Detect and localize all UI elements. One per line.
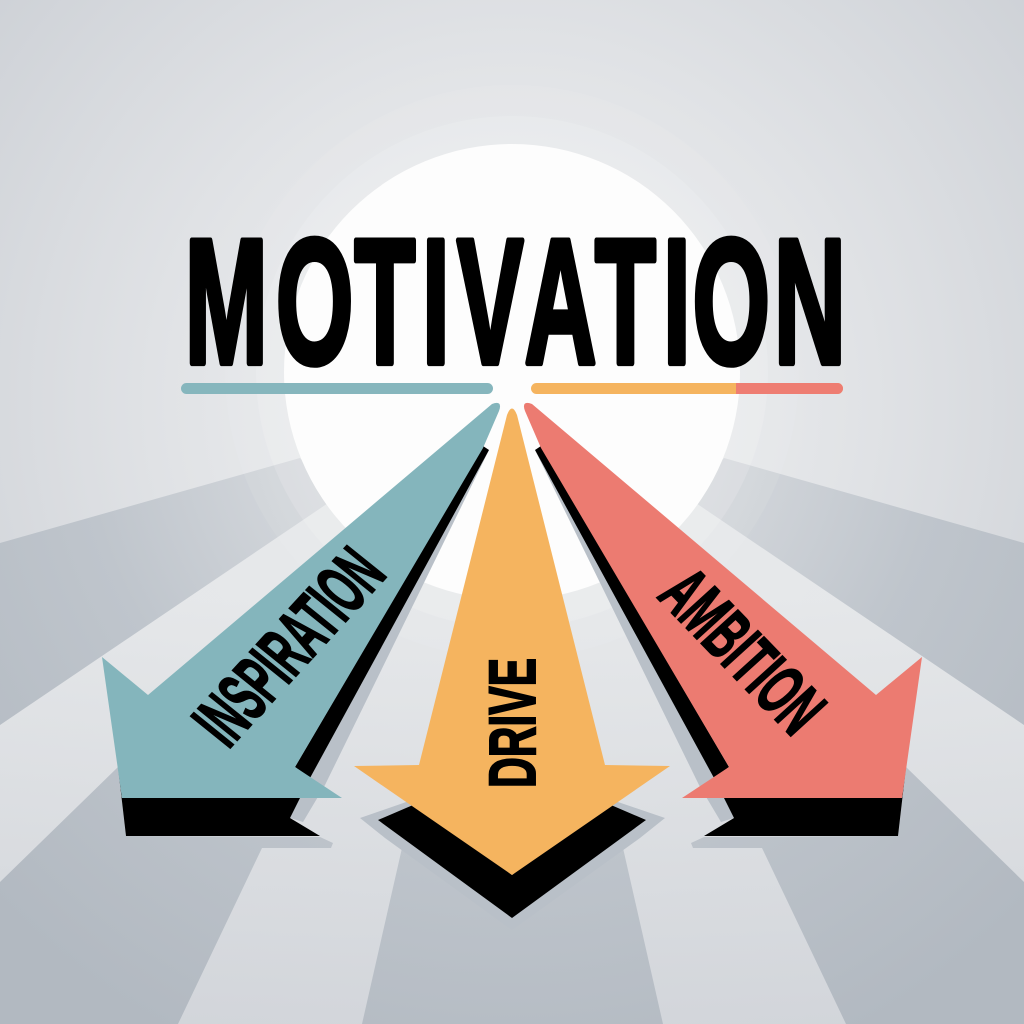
label: inspiration: INSPIRATION bbox=[176, 533, 401, 760]
arrow: drive bbox=[354, 408, 670, 930]
title underline bbox=[181, 383, 843, 394]
label: ambition: AMBITION bbox=[644, 553, 840, 749]
arrow: ambition bbox=[524, 403, 922, 836]
title: MOTIVATION bbox=[185, 201, 846, 401]
arrow: inspiration bbox=[102, 403, 500, 836]
sun glow circle bbox=[225, 85, 799, 659]
background rays bbox=[0, 458, 1024, 1024]
label: drive: DRIVE bbox=[476, 658, 549, 788]
